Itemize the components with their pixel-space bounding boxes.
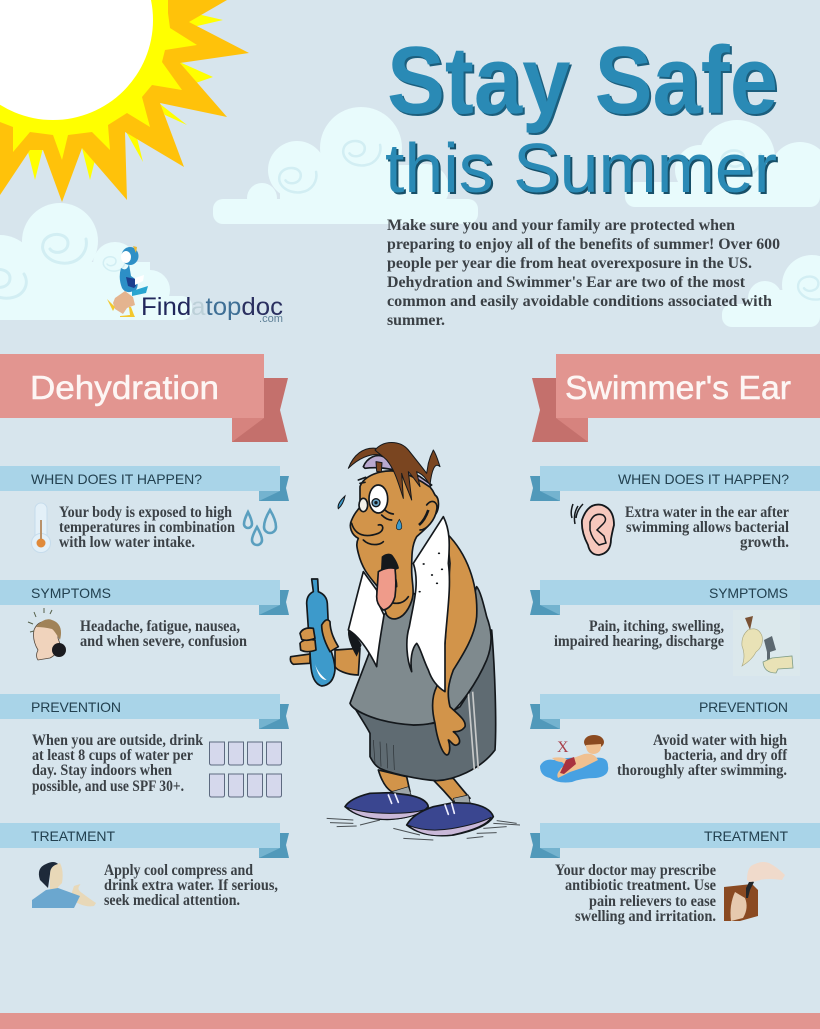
mouth — [381, 554, 399, 577]
text: Avoid water with high — [653, 732, 787, 749]
text: seek medical attention. — [104, 892, 240, 909]
head and face — [338, 442, 440, 619]
text: swimming allows bacterial — [626, 519, 790, 536]
ribbon heading: TREATMENT — [704, 828, 788, 844]
text: impaired hearing, discharge — [554, 633, 724, 650]
ribbon heading — [0, 823, 289, 858]
cloud: left — [0, 203, 192, 320]
text: swelling and irritation. — [575, 908, 716, 925]
title line: this Summer: this Summer — [387, 131, 779, 209]
banner: Swimmer's Ear: Swimmer's Ear — [565, 369, 791, 406]
text: at least 8 cups of water per — [32, 747, 193, 764]
right panel: when does it happen — [530, 466, 820, 555]
icon: water drops — [244, 510, 276, 545]
text — [59, 504, 235, 551]
text: temperatures in combination — [59, 519, 235, 536]
title — [385, 27, 780, 209]
ribbon heading: WHEN DOES IT HAPPEN? — [31, 471, 202, 487]
text: bacteria, and dry off — [664, 747, 788, 764]
sun — [0, 0, 249, 202]
text: pain relievers to ease — [589, 893, 716, 910]
text: growth. — [740, 534, 789, 551]
intro paragraph: common and easily avoidable conditions associated with — [387, 293, 772, 310]
ribbon heading: WHEN DOES IT HAPPEN? — [618, 471, 789, 487]
sweat drops — [338, 496, 345, 509]
text — [625, 504, 790, 551]
banner: Swimmer's Ear — [532, 354, 820, 442]
title line: this Summer: this Summer — [385, 129, 777, 207]
title line: Stay Safe: Stay Safe — [389, 29, 780, 136]
left panel: symptoms — [0, 580, 289, 660]
red X: X — [557, 739, 569, 756]
brow, nose and cheek lines — [352, 477, 408, 603]
intro paragraph: Dehydration and Swimmer's Ear are two of the most — [387, 274, 746, 291]
ribbon heading: PREVENTION — [699, 699, 788, 715]
intro paragraph — [387, 217, 780, 329]
ribbon heading — [530, 823, 820, 858]
shoes — [345, 793, 493, 836]
text: and when severe, confusion — [80, 633, 247, 650]
right panel: treatment — [530, 823, 820, 925]
tongue — [377, 568, 396, 610]
icon: ear — [571, 504, 614, 555]
cloud: upper centre — [213, 107, 478, 224]
shorts — [355, 630, 496, 781]
ear — [420, 501, 437, 530]
legs and socks — [378, 770, 471, 807]
ribbon heading — [0, 466, 289, 501]
text: day. Stay indoors when — [32, 762, 172, 779]
icon: otoscope ear exam — [733, 610, 800, 676]
title line: Stay Safe: Stay Safe — [387, 27, 778, 134]
text: possible, and use SPF 30+. — [32, 778, 184, 795]
cloud: upper right — [625, 120, 820, 207]
right eye — [369, 485, 388, 513]
text — [617, 732, 788, 779]
hair — [348, 442, 440, 500]
text: thoroughly after swimming. — [617, 762, 787, 779]
ribbon heading — [530, 466, 820, 501]
banner: Dehydration — [0, 354, 288, 442]
cloud: lower right — [722, 255, 820, 327]
ribbon heading: TREATMENT — [31, 828, 115, 844]
text — [555, 862, 716, 925]
logo: Findatopdoc — [107, 246, 283, 325]
ribbon heading — [530, 694, 820, 729]
icon: swimmer — [540, 735, 608, 782]
text: Apply cool compress and — [104, 862, 253, 879]
left panel: prevention — [0, 694, 289, 797]
forearm — [335, 648, 360, 675]
wordmark: Findatopdoc — [141, 293, 283, 321]
right panel: prevention — [530, 694, 820, 782]
text — [554, 618, 724, 650]
text: with low water intake. — [59, 534, 195, 551]
ribbon heading: SYMPTOMS — [709, 585, 788, 601]
icon: man drinking — [32, 862, 96, 908]
left panel: treatment — [0, 823, 289, 909]
right panel: symptoms — [530, 580, 820, 676]
ground hatch shadow — [327, 818, 520, 840]
banner: Dehydration: Dehydration — [30, 369, 219, 406]
intro paragraph: Make sure you and your family are protected when — [387, 217, 735, 234]
text: drink extra water. If serious, — [104, 877, 278, 894]
character: exhausted man with water bottle — [290, 442, 520, 840]
fingers on bottle — [290, 620, 338, 664]
head — [350, 471, 439, 619]
text — [32, 732, 203, 795]
ribbon heading — [0, 580, 289, 615]
left eye — [359, 498, 368, 512]
text: Extra water in the ear after — [625, 504, 789, 521]
.com: .com — [259, 313, 283, 325]
icon: ear drops — [724, 862, 785, 921]
intro paragraph: summer. — [387, 312, 445, 329]
ribbon heading — [530, 580, 820, 615]
text: Pain, itching, swelling, — [589, 618, 724, 635]
footer bar — [0, 1013, 820, 1029]
text: Your doctor may prescribe — [555, 862, 716, 879]
towel — [348, 517, 449, 692]
text — [80, 618, 247, 650]
shirt — [350, 587, 491, 725]
text: antibiotic treatment. Use — [565, 877, 716, 894]
water bottle — [307, 579, 335, 686]
text — [104, 862, 278, 909]
icon: woman with headache — [28, 608, 66, 660]
ribbon heading: SYMPTOMS — [31, 585, 111, 601]
intro paragraph: people per year die from heat overexposure in the US. — [387, 255, 752, 272]
icon: duck mascot — [107, 246, 148, 317]
text: When you are outside, drink — [32, 732, 203, 749]
ribbon heading: PREVENTION — [31, 699, 121, 715]
icon: thermometer — [32, 503, 50, 552]
headband — [363, 456, 432, 487]
arm and hanging hand — [433, 533, 477, 755]
icon: eight cups of water — [210, 742, 282, 797]
left panel: when does it happen — [0, 466, 289, 552]
text: Your body is exposed to high — [59, 504, 232, 521]
intro paragraph: preparing to enjoy all of the benefits of summer! Over 600 — [387, 236, 780, 253]
text: Headache, fatigue, nausea, — [80, 618, 240, 635]
ribbon heading — [0, 694, 289, 729]
